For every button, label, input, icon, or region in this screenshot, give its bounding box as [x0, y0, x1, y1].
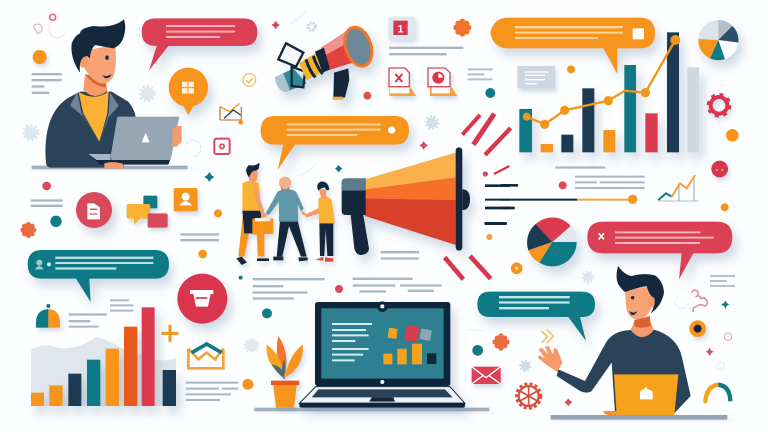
right doodles and icons	[675, 275, 735, 401]
orange dot	[33, 50, 47, 64]
text lines	[710, 275, 735, 287]
text lines	[253, 278, 442, 300]
table	[32, 166, 188, 169]
large megaphone	[342, 147, 470, 255]
pie chart	[527, 218, 577, 266]
megaphone cone layers	[365, 153, 456, 189]
gauge arc	[705, 385, 730, 401]
orange ring icon	[513, 265, 520, 272]
orange speech bubble top right	[490, 18, 655, 74]
doodle	[50, 14, 56, 20]
laptop screen text lines	[332, 323, 372, 361]
dome icon	[36, 304, 60, 328]
red sparkle	[706, 348, 714, 356]
red dot	[559, 181, 567, 189]
laptop screen chart	[383, 325, 436, 364]
hair	[71, 19, 125, 73]
orange round bubble	[169, 68, 208, 115]
teal dot	[472, 345, 483, 356]
faint gear	[521, 362, 530, 370]
laptop	[299, 301, 465, 408]
text lines	[389, 47, 463, 55]
teal speech bubble	[477, 292, 595, 341]
red circle document icon	[76, 192, 112, 228]
chevrons	[542, 329, 553, 343]
red rays	[445, 256, 491, 279]
red dot	[42, 182, 51, 190]
orange flower	[492, 333, 510, 351]
orange speech bubble	[261, 116, 409, 170]
dark ray	[484, 222, 507, 225]
small line chart	[658, 175, 699, 201]
text lines	[69, 233, 219, 328]
text lines	[555, 166, 645, 189]
doodle	[717, 362, 725, 370]
body	[557, 329, 691, 413]
red rays	[462, 114, 511, 177]
teal dot	[485, 88, 495, 98]
doodle	[49, 25, 65, 38]
gray card	[517, 66, 555, 88]
slider and right-hand data	[500, 184, 637, 209]
envelope	[472, 367, 501, 384]
faint gear	[249, 341, 258, 350]
text lines	[31, 199, 63, 207]
bar chart with trend line	[519, 32, 699, 152]
text lines	[32, 73, 62, 94]
teal dot	[239, 276, 243, 280]
right side icons	[517, 20, 739, 211]
red dot	[363, 92, 371, 100]
faint gear	[308, 23, 315, 30]
table	[254, 408, 489, 411]
centre bottom text and laptop	[244, 222, 510, 411]
hair	[617, 266, 664, 313]
plus icon	[163, 326, 177, 341]
check badge	[243, 74, 256, 86]
orange sparkle	[486, 234, 492, 240]
orange gap dot	[214, 209, 222, 217]
face	[83, 45, 116, 84]
orange flower	[20, 222, 36, 238]
orange dot	[721, 203, 729, 211]
pie chart	[698, 20, 738, 60]
orange dot	[567, 65, 575, 73]
faint gear	[583, 273, 593, 282]
area and bars chart	[31, 307, 176, 406]
orange dot	[726, 129, 739, 142]
doc icon x	[389, 68, 416, 96]
table	[551, 415, 727, 420]
orange target icon	[689, 320, 706, 337]
ray lines from megaphone	[485, 184, 510, 209]
red gear	[708, 94, 730, 116]
profile card	[174, 188, 198, 211]
card with number: 1	[398, 23, 404, 35]
teal sparkle	[204, 172, 214, 182]
faint cog	[24, 126, 37, 139]
bottom-left data area	[20, 216, 256, 406]
jacket	[45, 92, 136, 168]
top-left man with laptop	[32, 19, 188, 169]
orange dot	[198, 250, 207, 258]
hands	[172, 126, 182, 147]
group of three people	[236, 163, 335, 265]
orange laptop	[614, 374, 678, 415]
doodle	[692, 290, 707, 312]
envelope chart icon	[188, 344, 223, 368]
red blob	[711, 161, 728, 177]
doc icon pie	[428, 68, 457, 96]
mini chart	[220, 103, 243, 125]
red basket circle	[177, 274, 227, 324]
person two	[262, 177, 308, 261]
faint gear	[245, 340, 256, 351]
red square icon	[214, 139, 230, 154]
faint line	[290, 10, 307, 24]
orange dot	[244, 380, 254, 389]
doodle	[33, 24, 42, 33]
orange flower	[453, 19, 471, 37]
chat bubbles	[127, 196, 168, 228]
dashed ring	[185, 140, 201, 157]
card with number	[388, 17, 415, 39]
trend line	[523, 35, 680, 129]
doodle	[675, 295, 688, 308]
faint arc	[298, 163, 316, 175]
red dot	[335, 285, 343, 293]
teal dot	[50, 216, 62, 227]
teal sparkle	[721, 300, 729, 309]
teal speech bubble	[28, 250, 169, 302]
bottom-right area	[477, 218, 735, 420]
megaphone rear and handle	[351, 215, 369, 255]
icons around man	[24, 14, 256, 228]
teal sparkle	[335, 165, 342, 172]
top megaphone	[261, 10, 511, 177]
faint cog	[141, 87, 154, 100]
person three	[304, 181, 335, 262]
text lines	[186, 382, 238, 401]
person one	[236, 163, 273, 265]
faint doodle	[468, 330, 483, 331]
red gear wheel	[516, 384, 541, 408]
red sparkle	[271, 21, 280, 30]
red sparkle	[419, 141, 428, 150]
faint gear	[427, 117, 437, 128]
orange dot	[242, 379, 253, 390]
red speech bubble top	[142, 18, 257, 71]
laptop	[110, 117, 179, 160]
text lines	[468, 68, 493, 80]
text lines under people	[381, 251, 419, 260]
potted plant	[267, 336, 303, 408]
man two with laptop	[538, 266, 691, 415]
red sparkle	[564, 398, 572, 406]
teal dot	[262, 308, 272, 318]
red speech bubble	[587, 222, 732, 279]
raised hand	[538, 346, 562, 372]
doodle	[724, 333, 732, 340]
face	[625, 286, 652, 319]
